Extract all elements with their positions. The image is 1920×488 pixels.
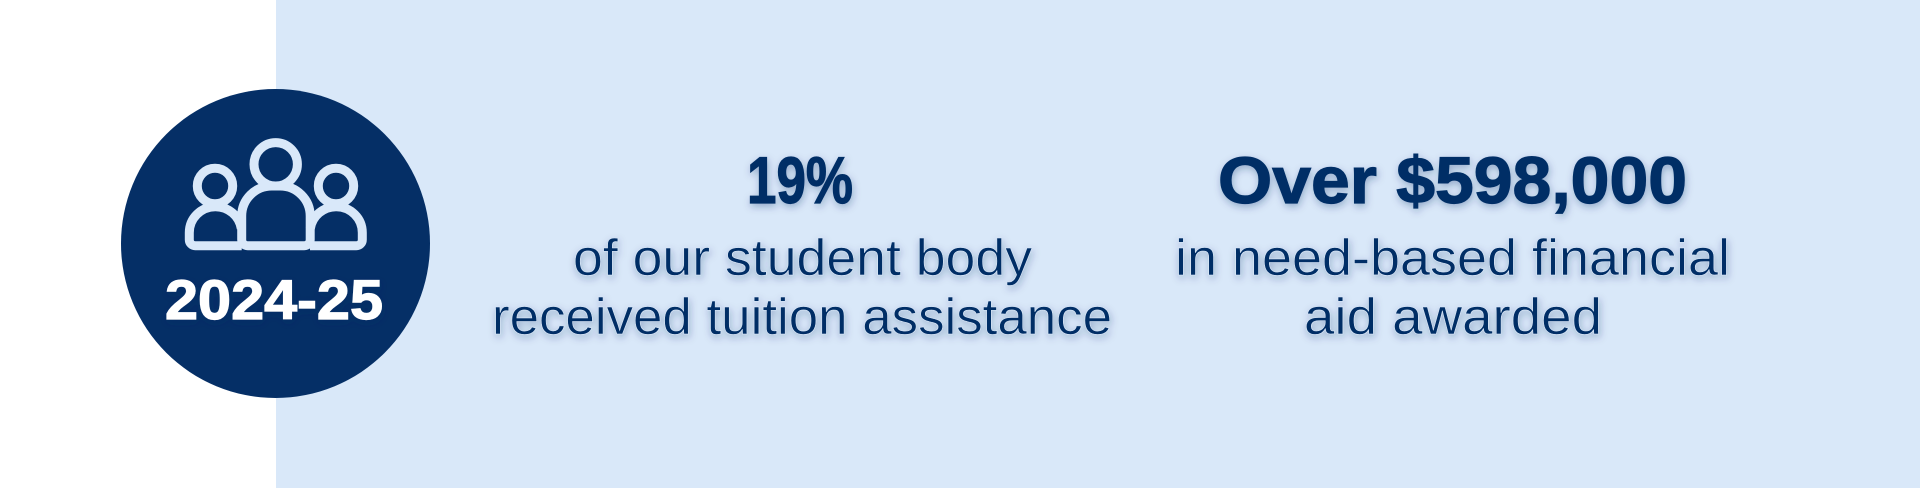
stat value: Over $598,000 <box>1218 143 1687 217</box>
year badge <box>121 89 430 398</box>
stat description: aid awarded <box>1304 288 1602 345</box>
stat description: received tuition assistance <box>492 288 1112 345</box>
stat description: in need-based financial <box>1175 229 1730 286</box>
badge circle <box>121 89 430 398</box>
year label: 2024-25 <box>165 268 383 331</box>
stat description <box>492 229 1112 345</box>
stat description: of our student body <box>573 229 1033 286</box>
stat: financial aid <box>1175 143 1730 345</box>
stat description <box>1175 229 1730 345</box>
stat: tuition assistance <box>492 143 1112 345</box>
stat value: 19% <box>747 143 853 217</box>
icon: group of three people <box>189 143 362 246</box>
